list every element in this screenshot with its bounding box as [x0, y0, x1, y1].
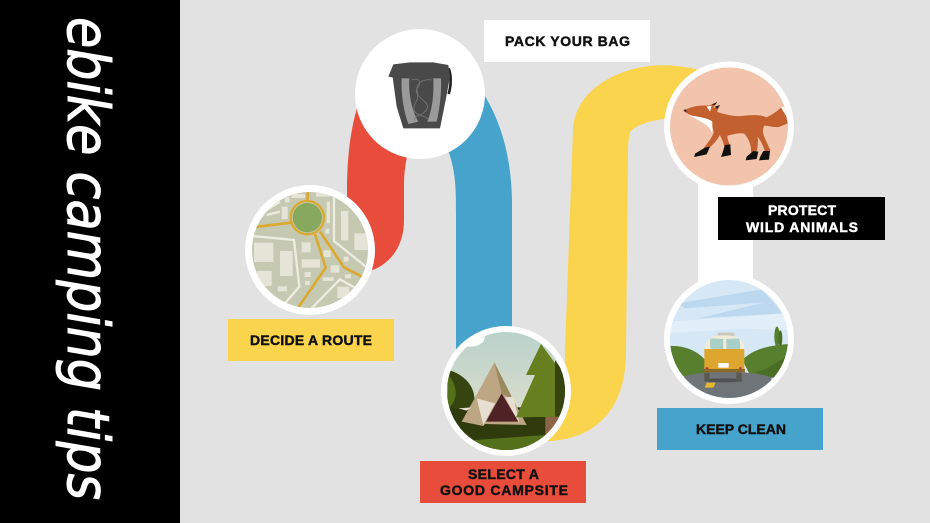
step: van circle	[664, 274, 794, 404]
step: backpack circle	[355, 29, 485, 159]
label: protect wild animals: PROTECT	[768, 202, 836, 218]
label: decide a route	[228, 319, 394, 361]
label: keep clean	[657, 408, 823, 450]
label: select a good campsite	[420, 461, 586, 503]
icon: fox	[683, 102, 788, 160]
path segment: red	[347, 105, 415, 270]
panel: title sidebar	[0, 0, 180, 523]
label: protect wild animals	[718, 197, 885, 240]
step: map circle	[245, 185, 375, 315]
step: campsite circle	[441, 326, 571, 456]
label: select a good campsite: GOOD CAMPSITE	[440, 482, 568, 498]
label: pack your bag	[484, 20, 650, 62]
label: select a good campsite: SELECT A	[468, 466, 539, 482]
icon: bag	[388, 62, 451, 128]
path segment: yellow	[540, 65, 700, 441]
label: pack your bag: PACK YOUR BAG	[505, 33, 630, 49]
path segment: white	[698, 170, 753, 290]
step: fox circle	[664, 62, 794, 192]
label: protect wild animals: WILD ANIMALS	[746, 219, 858, 235]
path segment: blue	[448, 96, 512, 350]
label: decide a route: DECIDE A ROUTE	[250, 332, 372, 348]
label: keep clean: KEEP CLEAN	[696, 421, 786, 437]
